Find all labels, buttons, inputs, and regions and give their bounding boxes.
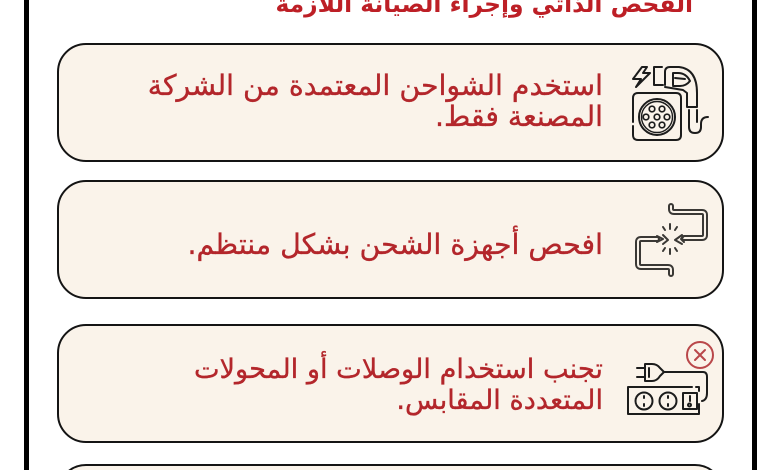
panel: inspect charging devices — [57, 180, 724, 299]
panel: use approved chargers — [57, 43, 724, 162]
text: avoid extensions and adapters: تجنب استخدام الوصلات أو المحولات — [194, 354, 603, 385]
text: use approved chargers: استخدم الشواحن المعتمدة من الشركة — [148, 69, 603, 102]
icon: power strip — [628, 387, 699, 414]
panel: avoid extensions and adapters — [57, 324, 724, 443]
text: use approved chargers — [148, 69, 603, 133]
text: avoid extensions and adapters: المتعددة المقابس. — [396, 385, 603, 416]
text: use approved chargers: المصنعة فقط. — [435, 100, 603, 133]
panel: next card (cropped) — [68, 464, 713, 470]
text: inspect charging devices: افحص أجهزة الشحن بشكل منتظم. — [188, 228, 603, 261]
icon: plug and cord — [637, 364, 707, 401]
text: avoid extensions and adapters — [194, 350, 603, 416]
icon: red cross circle — [687, 342, 713, 368]
